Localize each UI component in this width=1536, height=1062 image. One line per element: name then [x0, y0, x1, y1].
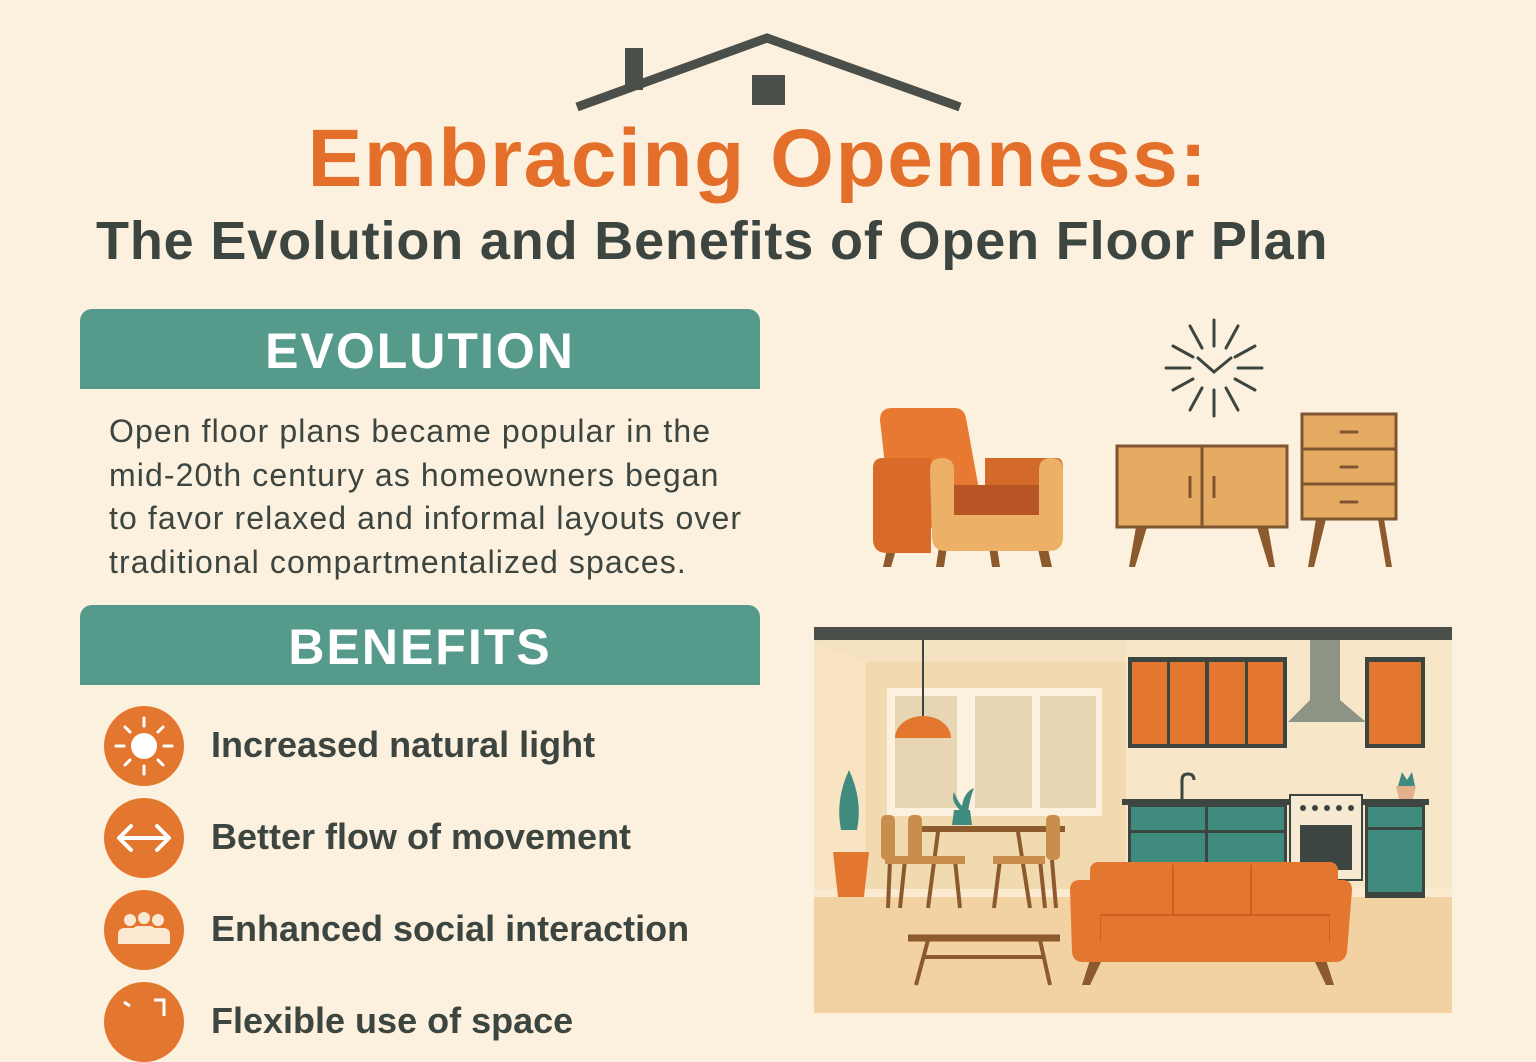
upper cabinets	[1128, 657, 1425, 748]
icon: clock	[1166, 320, 1262, 416]
heading: benefits	[80, 605, 760, 685]
icon: sideboard	[1117, 446, 1287, 567]
beam	[814, 627, 1452, 640]
coffee table	[908, 938, 1060, 985]
benefit: light	[104, 706, 595, 786]
plant	[833, 770, 869, 897]
benefit: flow	[104, 798, 631, 878]
text block: evolution	[109, 413, 742, 580]
icon: armchair	[873, 408, 1063, 567]
sofa	[1070, 862, 1352, 985]
text block: evolution: mid-20th century as homeowners began	[109, 456, 720, 492]
text block: evolution: to favor relaxed and informal layouts over	[109, 500, 742, 536]
hood	[1288, 640, 1366, 722]
benefit: light: Increased natural light	[211, 724, 595, 765]
heading: evolution: EVOLUTION	[265, 323, 575, 379]
text block: evolution: traditional compartmentalized spaces.	[109, 544, 687, 580]
benefit: flow: Better flow of movement	[211, 816, 631, 857]
counter & cabinets	[1122, 772, 1429, 898]
dining table and chairs	[888, 829, 1065, 908]
illustration: open plan room	[814, 627, 1452, 1013]
benefit: flexible: Flexible use of space	[211, 1000, 573, 1041]
benefit: social	[104, 890, 689, 970]
text block: evolution: Open floor plans became popular in the	[109, 413, 711, 449]
heading: benefits: BENEFITS	[288, 619, 552, 675]
illustration: furniture	[873, 318, 1398, 567]
title: Embracing Openness:	[308, 113, 1208, 204]
subtitle: The Evolution and Benefits of Open Floor Plan	[96, 211, 1328, 271]
benefit: flexible	[104, 982, 573, 1062]
window	[887, 688, 1102, 816]
icon: house roof	[576, 33, 962, 112]
icon: dresser	[1302, 414, 1396, 567]
lamp	[895, 640, 951, 738]
heading: evolution	[80, 309, 760, 389]
benefit: social: Enhanced social interaction	[211, 908, 689, 949]
